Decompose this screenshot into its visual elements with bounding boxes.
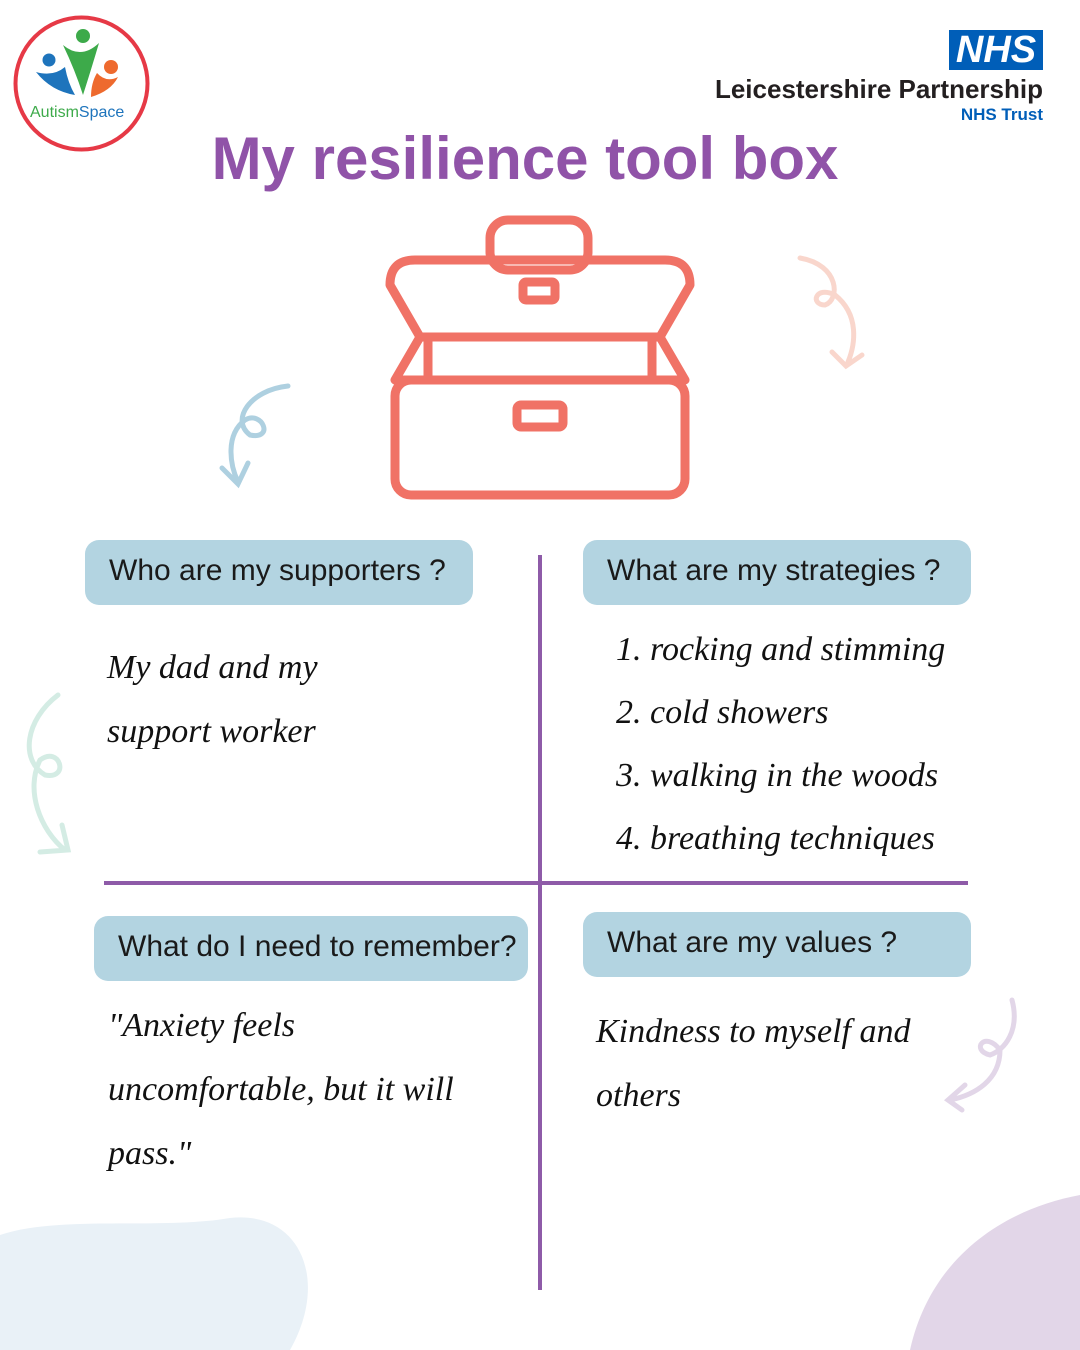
text: values: Kindness to myself and	[596, 1013, 910, 1050]
logo: NHS: NHS Trust	[961, 105, 1043, 124]
logo: NHS: Leicestershire Partnership	[715, 74, 1043, 104]
text: remember: uncomfortable, but it will	[108, 1071, 454, 1108]
title: My resilience tool box	[212, 125, 838, 192]
panel: remember	[94, 916, 528, 1172]
text: strategies: 1. rocking and stimming	[616, 631, 945, 668]
heading: strategies	[583, 540, 971, 605]
text: supporters	[106, 649, 318, 750]
text: remember	[106, 1007, 454, 1172]
dividers	[538, 555, 542, 1290]
heading: remember	[94, 916, 528, 981]
text: supporters: My dad and my	[107, 649, 318, 686]
text: strategies: 2. cold showers	[616, 694, 828, 731]
panel: values	[583, 912, 971, 1114]
heading: remember: What do I need to remember?	[118, 930, 517, 963]
heading: strategies: What are my strategies ?	[607, 554, 940, 587]
logo: NHS: NHS	[956, 29, 1036, 71]
heading: values	[583, 912, 971, 977]
text: strategies: 3. walking in the woods	[616, 757, 938, 794]
logo: NHS	[715, 29, 1043, 124]
logo: AutismSpace	[14, 16, 150, 152]
text: remember: "Anxiety feels	[108, 1007, 295, 1044]
text: supporters: support worker	[107, 713, 316, 750]
logo: AutismSpace: AutismSpace	[30, 104, 124, 121]
panel: strategies	[583, 540, 971, 857]
heading: supporters: Who are my supporters ?	[109, 554, 446, 587]
text: strategies	[616, 631, 945, 857]
icon: toolbox	[386, 216, 694, 500]
text: remember: pass."	[108, 1135, 191, 1172]
text: values: others	[596, 1077, 681, 1114]
text: values	[596, 1013, 911, 1114]
text: strategies: 4. breathing techniques	[616, 820, 935, 857]
heading: supporters	[85, 540, 473, 605]
panel: supporters	[85, 540, 473, 750]
heading: values: What are my values ?	[607, 926, 897, 959]
